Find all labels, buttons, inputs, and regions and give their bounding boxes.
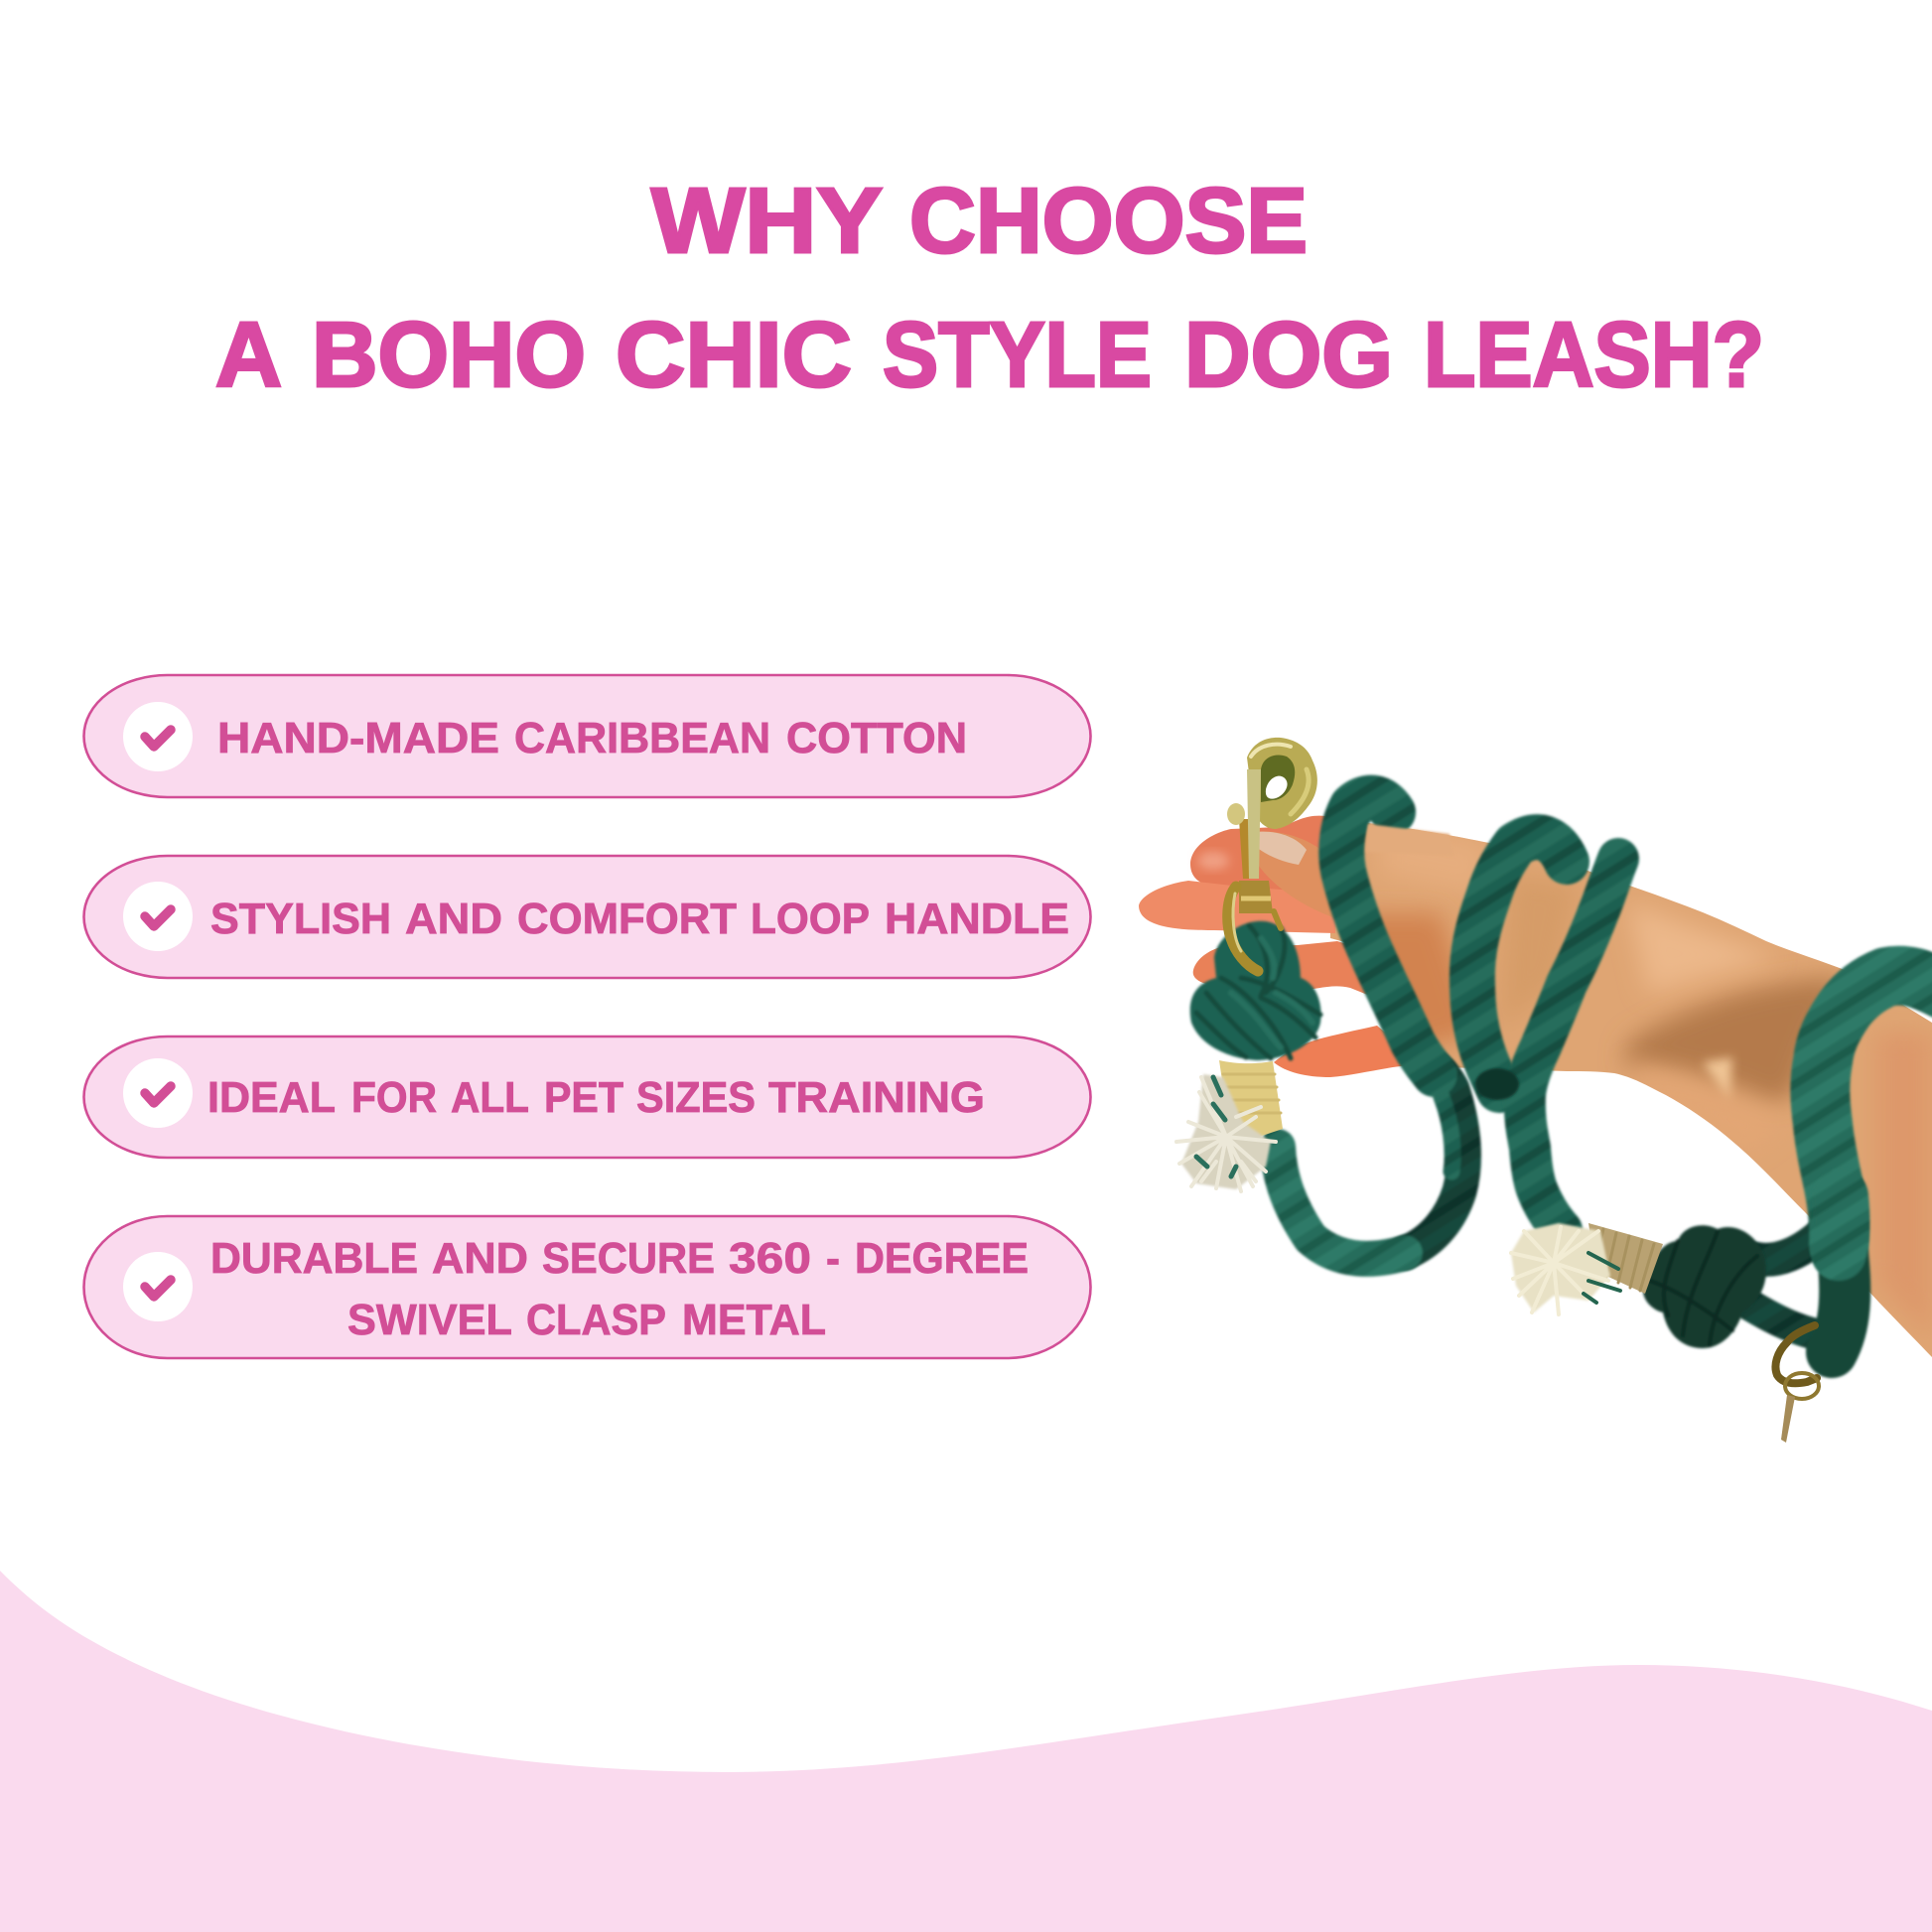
- leash rope lower loop light section: [1278, 1147, 1405, 1259]
- feature text: LOOP: [751, 895, 870, 943]
- feature text: HAND-MADE: [217, 714, 499, 762]
- frayed end 1: [1176, 1074, 1276, 1191]
- feature text: DURABLE: [210, 1234, 418, 1283]
- feature text: AND: [432, 1234, 528, 1283]
- leash rope lower loop dark section: [1405, 1067, 1463, 1253]
- title line 2: A: [215, 303, 282, 406]
- thumbnail: [1253, 832, 1307, 865]
- title line 2: STYLE: [883, 303, 1152, 406]
- feature text: [210, 895, 1069, 943]
- title line 2: DOG: [1184, 303, 1393, 406]
- beige wrap 2: [1588, 1223, 1663, 1294]
- feature text: ALL: [451, 1073, 529, 1122]
- feature text: COMFORT: [517, 895, 737, 943]
- feature pill 3: [83, 1036, 1090, 1158]
- feature pill 2: [83, 856, 1090, 978]
- rope knot 1: [1190, 921, 1321, 1060]
- clasp hook: [1247, 738, 1317, 829]
- hand and forearm: [1139, 816, 1932, 1357]
- fingertip highlight: [1197, 852, 1229, 870]
- frayed end 2: [1511, 1223, 1620, 1314]
- feature text: [210, 1234, 1029, 1344]
- feature text: HANDLE: [885, 895, 1069, 943]
- leash rope around forearm: [1820, 976, 1932, 1244]
- feature text: PET: [544, 1073, 623, 1122]
- feature text: [207, 1073, 985, 1122]
- leash rope to frayed end: [1525, 859, 1618, 1230]
- leash rope over palm: [1472, 837, 1567, 1090]
- icon: check badge: [123, 702, 193, 771]
- title line 2: LEASH?: [1424, 303, 1764, 406]
- title: [215, 169, 1764, 406]
- icon: check badge: [123, 1252, 193, 1321]
- feature text: METAL: [682, 1296, 826, 1344]
- feature text: DEGREE: [855, 1234, 1029, 1283]
- title line 1: WHY: [651, 169, 883, 272]
- clasp D ring: [1228, 887, 1258, 971]
- clasp back bar: [1239, 819, 1253, 879]
- feature text: SWIVEL: [347, 1296, 512, 1344]
- leash rope hanging end: [1832, 1196, 1845, 1352]
- feature pill 1: [83, 675, 1090, 797]
- title line 2: [215, 303, 1764, 406]
- ring finger: [1193, 941, 1375, 998]
- feature text: SECURE: [542, 1234, 715, 1283]
- index finger: [1190, 816, 1335, 894]
- feature text: STYLISH: [210, 895, 391, 943]
- clasp front bar: [1247, 769, 1261, 879]
- rope knot 2: [1643, 1225, 1766, 1348]
- clasp side knob: [1227, 803, 1245, 825]
- feature text: AND: [405, 895, 502, 943]
- feature text: 360: [729, 1234, 811, 1283]
- feature text: TRAINING: [768, 1073, 985, 1122]
- feature text: SIZES: [636, 1073, 756, 1122]
- title line 2: BOHO: [312, 303, 586, 406]
- feature text: -: [826, 1234, 840, 1283]
- feature text: [217, 714, 967, 762]
- finger over rope: [1366, 824, 1454, 856]
- feature text: FOR: [351, 1073, 437, 1122]
- icon: check badge: [123, 882, 193, 951]
- leash rope over finger: [1341, 798, 1435, 1074]
- dark rope junction: [1475, 1068, 1519, 1100]
- clasp swivel: [1239, 881, 1273, 913]
- title line 2: CHIC: [616, 303, 852, 406]
- feature text: IDEAL: [207, 1073, 336, 1122]
- brass snap clasp: [1227, 738, 1317, 971]
- title line 1: [651, 169, 1308, 272]
- little finger: [1274, 1026, 1415, 1077]
- thumb: [1250, 831, 1335, 918]
- middle finger: [1139, 881, 1335, 933]
- photo: hand holding green rope leash: [1139, 738, 1932, 1443]
- feature text: COTTON: [786, 714, 967, 762]
- feature text: CLASP: [526, 1296, 666, 1344]
- feature pill 4: [83, 1216, 1090, 1358]
- beige wrap 1: [1219, 1060, 1283, 1137]
- background wave: [0, 1571, 1932, 1932]
- feature text: CARIBBEAN: [514, 714, 770, 762]
- icon: check badge: [123, 1058, 193, 1128]
- small brass ring and tag: [1775, 1325, 1819, 1443]
- title line 1: CHOOSE: [909, 169, 1308, 272]
- dark ropes from second knot: [1742, 1231, 1825, 1335]
